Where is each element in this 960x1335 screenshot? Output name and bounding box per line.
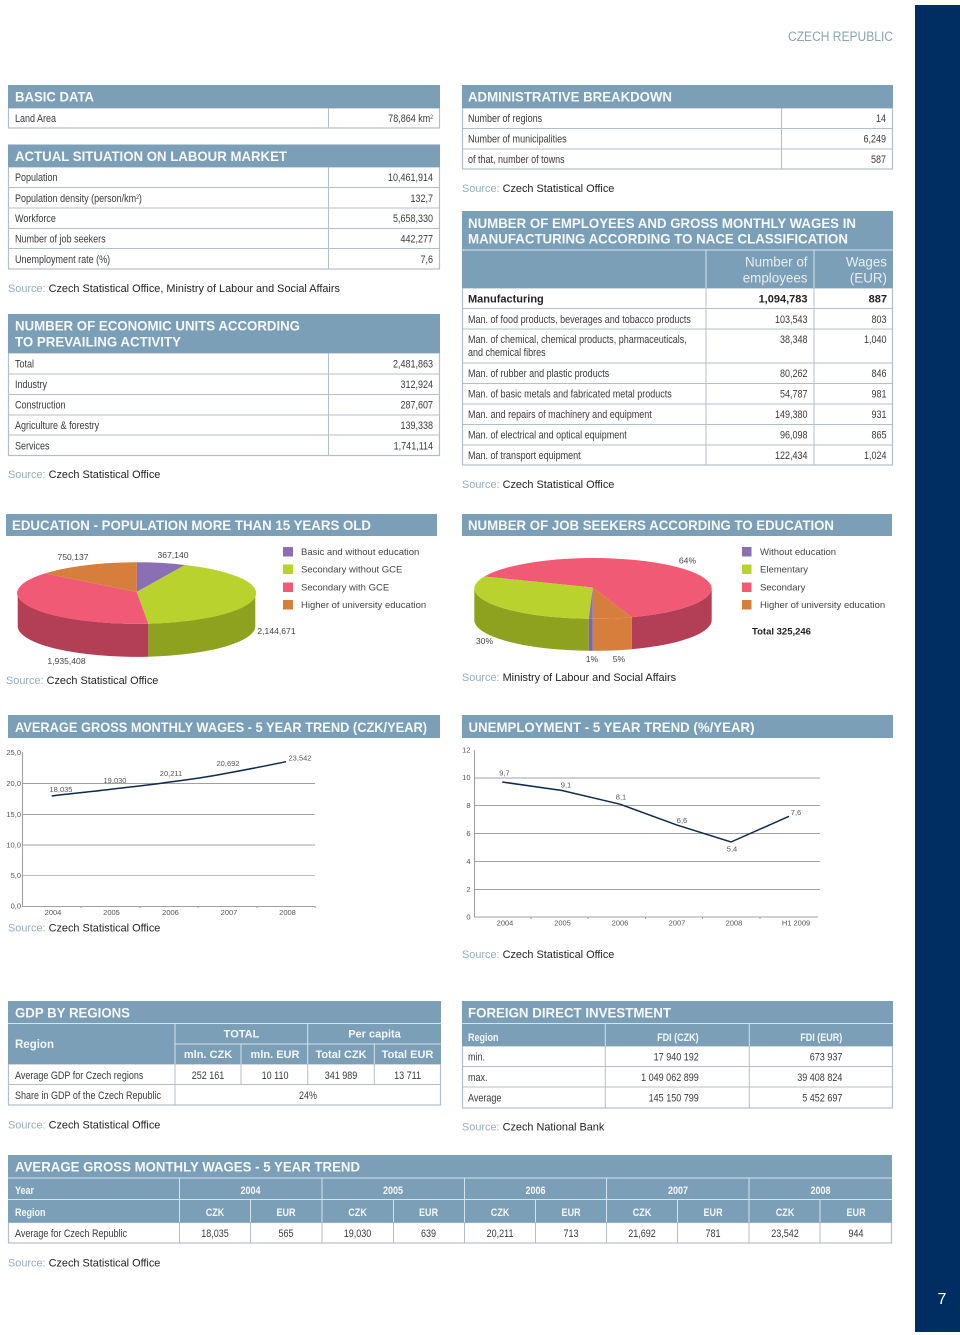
total: job seekers: Total 325,246 bbox=[752, 626, 811, 638]
row: average for Czech Republic bbox=[15, 1228, 864, 1240]
data labels: wages: 20,211 bbox=[160, 769, 182, 778]
panel: job seekers pie bbox=[462, 514, 892, 664]
panel: foreign direct investment bbox=[462, 1001, 893, 1108]
y axis labels: unemployment: 10 bbox=[462, 773, 470, 782]
row: average for Czech Republic: Average for Czech Republic bbox=[15, 1228, 127, 1240]
column headers bbox=[15, 1028, 433, 1061]
currency row: EUR bbox=[704, 1207, 723, 1219]
column headers: FDI (EUR) bbox=[800, 1032, 842, 1044]
rows: labour market data bbox=[15, 172, 433, 266]
rows: economic units data: Total bbox=[15, 359, 34, 371]
rows: administrative data: Number of municipalities bbox=[468, 134, 567, 146]
data labels: unemployment bbox=[499, 768, 801, 854]
rows: labour market data: 5,658,330 bbox=[393, 213, 433, 225]
x axis labels: unemployment: 2005 bbox=[554, 918, 571, 928]
rows: labour market data: 10,461,914 bbox=[388, 172, 433, 184]
rows: labour market data: ) bbox=[139, 193, 142, 205]
source: job seekers: Source: Ministry of Labour and Social Affairs bbox=[462, 672, 677, 684]
row: average for Czech Republic: 18,035 bbox=[201, 1228, 229, 1240]
rows: GDP data: Average GDP for Czech regions bbox=[15, 1070, 143, 1082]
x axis labels: unemployment: 2007 bbox=[669, 918, 685, 928]
rows: labour market data: Population density (person/km bbox=[15, 193, 136, 205]
rows: FDI data: 1 049 062 899 bbox=[641, 1072, 699, 1084]
data labels: unemployment: 9,7 bbox=[499, 768, 510, 778]
rows: manufacturing data: 96,098 bbox=[780, 430, 808, 442]
source: administrative: Source: Czech Statistical Office bbox=[462, 183, 614, 195]
heading: FDI: FOREIGN DIRECT INVESTMENT bbox=[468, 1004, 671, 1020]
y axis labels: unemployment: 0 bbox=[466, 912, 470, 922]
page heading: country: CZECH REPUBLIC bbox=[788, 29, 893, 44]
heading: wages trend table: AVERAGE GROSS MONTHLY WAGES - 5 YEAR TREND bbox=[15, 1158, 360, 1174]
rows: manufacturing data: 149,380 bbox=[775, 409, 808, 421]
x axis labels: unemployment: 2008 bbox=[726, 918, 742, 928]
year row: 2004 bbox=[241, 1185, 261, 1197]
row: average for Czech Republic: 781 bbox=[706, 1228, 721, 1240]
rows: economic units data: 287,607 bbox=[401, 400, 433, 412]
column headers: Per capita bbox=[348, 1028, 402, 1040]
x axis labels: wages: 2008 bbox=[279, 908, 296, 917]
rows: FDI data: 145 150 799 bbox=[649, 1093, 699, 1105]
rows: manufacturing data: 846 bbox=[872, 368, 887, 380]
rows: economic units data: Industry bbox=[15, 379, 47, 391]
rows: administrative data: 14 bbox=[876, 113, 886, 125]
panel: basic data bbox=[8, 85, 440, 128]
heading: job seekers: NUMBER OF JOB SEEKERS ACCORDING TO EDUCATION bbox=[468, 517, 834, 533]
heading: administrative breakdown: ADMINISTRATIVE BREAKDOWN bbox=[468, 88, 672, 104]
rows: economic units data: 2,481,863 bbox=[393, 359, 433, 371]
heading: education: EDUCATION - POPULATION MORE THAN 15 YEARS OLD bbox=[12, 517, 371, 533]
rows: FDI data: 673 937 bbox=[810, 1052, 843, 1064]
rows: manufacturing data: 38,348 bbox=[780, 334, 808, 346]
column headers: employees bbox=[743, 270, 808, 286]
data labels: unemployment: 8,1 bbox=[616, 792, 626, 802]
heading: manufacturing: MANUFACTURING ACCORDING TO NACE CLASSIFICATION bbox=[468, 230, 848, 246]
y axis labels: unemployment: 6 bbox=[466, 829, 470, 838]
column headers: Total CZK bbox=[315, 1049, 367, 1061]
rows: manufacturing data: 803 bbox=[872, 314, 887, 326]
source: FDI: Source: Czech National Bank bbox=[462, 1122, 605, 1134]
line chart: unemployment bbox=[462, 746, 820, 928]
panel: employees and wages in manufacturing bbox=[462, 211, 893, 465]
rows: economic units data: Construction bbox=[15, 400, 66, 412]
rows: economic units data: 1,741,114 bbox=[394, 441, 433, 453]
row: average for Czech Republic: 639 bbox=[421, 1228, 436, 1240]
pie chart: education bbox=[17, 562, 256, 657]
legend: education: Secondary with GCE bbox=[301, 582, 389, 594]
row: average for Czech Republic: 19,030 bbox=[344, 1228, 372, 1240]
pie labels: 1,935,408 bbox=[47, 656, 86, 666]
rows: labour market data: 442,277 bbox=[401, 234, 433, 246]
column headers: Total EUR bbox=[382, 1049, 433, 1061]
y axis labels: wages: 20,0 bbox=[6, 779, 21, 788]
currency row: CZK bbox=[206, 1207, 225, 1219]
rows: GDP data: Share in GDP of the Czech Republic bbox=[15, 1090, 161, 1102]
rows: administrative data: of that, number of towns bbox=[468, 154, 565, 166]
year row: 2006 bbox=[526, 1185, 546, 1197]
column headers: Wages bbox=[846, 254, 887, 270]
rows: manufacturing data: Man. of electrical and optical equipment bbox=[468, 430, 627, 442]
x axis labels: wages bbox=[45, 908, 296, 917]
rows: economic units data: 312,924 bbox=[401, 379, 433, 391]
pie labels bbox=[47, 550, 296, 666]
panel: wages trend table bbox=[8, 1155, 892, 1243]
data labels: wages: 19,030 bbox=[104, 776, 126, 785]
rows: manufacturing data: 80,262 bbox=[780, 368, 808, 380]
year row: Year bbox=[15, 1185, 34, 1197]
rows: FDI data bbox=[468, 1052, 843, 1105]
rows: FDI data: 39 408 824 bbox=[797, 1072, 843, 1084]
panel: actual situation on labour market bbox=[8, 144, 440, 269]
rows: manufacturing data: 103,543 bbox=[775, 314, 808, 326]
data labels: unemployment: 9,1 bbox=[561, 780, 571, 790]
x axis labels: unemployment: 2004 bbox=[497, 918, 513, 928]
currency row: EUR bbox=[562, 1207, 581, 1219]
heading: unemployment trend: UNEMPLOYMENT - 5 YEAR TREND (%/YEAR) bbox=[468, 719, 754, 735]
source: wages trend: Source: Czech Statistical Office bbox=[8, 922, 160, 934]
heading: basic data: BASIC DATA bbox=[15, 88, 94, 104]
panel: administrative breakdown bbox=[462, 85, 893, 169]
row: average for Czech Republic: 20,211 bbox=[487, 1228, 514, 1240]
data labels: wages: 20,692 bbox=[217, 759, 239, 768]
row: manufacturing total bbox=[468, 294, 887, 306]
pie labels: 30% bbox=[476, 636, 493, 646]
row: average for Czech Republic: 713 bbox=[564, 1228, 579, 1240]
y axis labels: unemployment: 8 bbox=[466, 801, 470, 810]
panel: GDP by regions bbox=[8, 1001, 441, 1105]
pie labels: 750,137 bbox=[57, 552, 89, 562]
panel: education pie bbox=[6, 514, 437, 666]
rows: economic units data: Services bbox=[15, 441, 50, 453]
y axis labels: unemployment: 4 bbox=[466, 857, 470, 866]
rows: economic units data: Agriculture & forestry bbox=[15, 420, 99, 432]
y axis labels: wages: 0,0 bbox=[11, 902, 21, 910]
rows: administrative data: 6,249 bbox=[864, 134, 886, 146]
pie chart: job seekers bbox=[474, 558, 712, 651]
rows: manufacturing data: 122,434 bbox=[775, 450, 808, 462]
data labels: unemployment: 5,4 bbox=[727, 844, 737, 854]
rows: labour market data: 7,6 bbox=[421, 254, 433, 266]
sidebar bbox=[915, 5, 960, 1332]
rows: GDP data: 252 161 bbox=[192, 1070, 225, 1082]
column headers: Number of bbox=[745, 254, 808, 270]
rows: manufacturing data: Man. of transport equipment bbox=[468, 450, 581, 462]
source: unemployment trend: Source: Czech Statistical Office bbox=[462, 949, 614, 961]
x axis labels: wages: 2005 bbox=[103, 908, 120, 917]
rows: economic units data: 139,338 bbox=[401, 420, 433, 432]
row: land area bbox=[15, 113, 433, 125]
row: average for Czech Republic: 23,542 bbox=[771, 1228, 799, 1240]
source: labour market: Source: Czech Statistical Office, Ministry of Labour and Social Affairs bbox=[8, 283, 340, 295]
column headers bbox=[743, 254, 887, 286]
row: land area: 2 bbox=[430, 115, 433, 121]
pie labels: 1% bbox=[586, 654, 599, 664]
year row: 2007 bbox=[668, 1185, 688, 1197]
data labels: unemployment: 6,6 bbox=[677, 816, 687, 825]
rows: GDP data: 10 110 bbox=[262, 1070, 289, 1082]
rows: FDI data: 17 940 192 bbox=[654, 1052, 699, 1064]
legend: job seekers bbox=[742, 547, 885, 611]
heading: GDP by regions: GDP BY REGIONS bbox=[15, 1004, 130, 1020]
data labels: wages: 18,035 bbox=[50, 785, 72, 794]
year row bbox=[15, 1185, 831, 1197]
year row: 2005 bbox=[383, 1185, 403, 1197]
rows: manufacturing data: 54,787 bbox=[780, 389, 808, 401]
rows: manufacturing data: Man. of basic metals and fabricated metal products bbox=[468, 389, 672, 401]
line chart: wages bbox=[6, 748, 315, 917]
rows: manufacturing data: Man. of rubber and plastic products bbox=[468, 368, 609, 380]
y axis labels: wages: 25,0 bbox=[6, 748, 21, 757]
rows: manufacturing data: 1,040 bbox=[864, 334, 887, 346]
rows: manufacturing data: 981 bbox=[872, 389, 887, 401]
legend: job seekers: Elementary bbox=[760, 564, 808, 576]
rows: labour market data: Workforce bbox=[15, 213, 56, 225]
rows: manufacturing data: 865 bbox=[872, 430, 887, 442]
y axis labels: wages: 15,0 bbox=[6, 810, 21, 819]
data labels: unemployment: 7,6 bbox=[791, 808, 801, 817]
row: average for Czech Republic: 21,692 bbox=[628, 1228, 656, 1240]
pie labels: 64% bbox=[679, 556, 696, 566]
rows: FDI data: Average bbox=[468, 1093, 502, 1105]
panel: unemployment trend chart bbox=[462, 715, 893, 928]
currency row: CZK bbox=[633, 1207, 652, 1219]
column headers: Region bbox=[468, 1032, 499, 1044]
source: economic units: Source: Czech Statistical Office bbox=[8, 469, 160, 481]
rows: labour market data: Number of job seekers bbox=[15, 234, 106, 246]
row: average for Czech Republic: 565 bbox=[279, 1228, 294, 1240]
rows: manufacturing data: 931 bbox=[872, 409, 887, 421]
source: GDP: Source: Czech Statistical Office bbox=[8, 1120, 160, 1132]
currency row: Region bbox=[15, 1207, 46, 1219]
source: wages trend table: Source: Czech Statistical Office bbox=[8, 1258, 160, 1270]
heading: economic units bbox=[15, 318, 300, 350]
heading: manufacturing bbox=[468, 215, 856, 246]
legend: job seekers: Without education bbox=[760, 547, 836, 558]
y axis labels: unemployment: 12 bbox=[462, 746, 470, 754]
column headers: mln. EUR bbox=[251, 1049, 299, 1061]
year row: 2008 bbox=[811, 1185, 831, 1197]
currency row bbox=[15, 1207, 866, 1219]
column headers: mln. CZK bbox=[184, 1049, 232, 1061]
rows: FDI data: max. bbox=[468, 1072, 488, 1084]
x axis labels: wages: 2006 bbox=[162, 908, 179, 917]
rows: GDP data: 341 989 bbox=[325, 1070, 358, 1082]
panel: economic units bbox=[8, 314, 440, 456]
rows: labour market data: Population bbox=[15, 172, 58, 184]
rows: GDP data: 24% bbox=[299, 1090, 317, 1102]
pie labels: 2,144,671 bbox=[257, 626, 296, 636]
currency row: EUR bbox=[847, 1207, 866, 1219]
row: land area: Land Area bbox=[15, 113, 56, 125]
rows: administrative data: Number of regions bbox=[468, 113, 542, 125]
rows: manufacturing data bbox=[468, 314, 887, 462]
rows: manufacturing data: Man. of food products, beverages and tobacco products bbox=[468, 314, 691, 326]
legend: job seekers: Higher of university education bbox=[760, 600, 885, 611]
legend: education: Basic and without education bbox=[301, 547, 419, 558]
legend: education: Higher of university education bbox=[301, 600, 426, 611]
rows: administrative data bbox=[468, 113, 886, 166]
pie labels: 5% bbox=[613, 654, 626, 664]
row: land area: 78,864 km bbox=[388, 113, 430, 125]
x axis labels: unemployment: H1 2009 bbox=[782, 918, 810, 928]
legend: education bbox=[283, 547, 426, 611]
pie labels: 367,140 bbox=[157, 550, 189, 560]
x axis labels: unemployment: 2006 bbox=[612, 918, 628, 928]
column headers: TOTAL bbox=[224, 1028, 260, 1040]
rows: FDI data: min. bbox=[468, 1052, 485, 1064]
page number: 7 bbox=[938, 1291, 947, 1308]
currency row: CZK bbox=[348, 1207, 367, 1219]
rows: manufacturing data: 1,024 bbox=[864, 450, 887, 462]
panel: wages trend chart bbox=[6, 715, 440, 917]
legend: education: Secondary without GCE bbox=[301, 564, 402, 576]
source: education: Source: Czech Statistical Office bbox=[6, 675, 158, 687]
y axis labels: wages: 5,0 bbox=[11, 871, 21, 880]
x axis labels: wages: 2004 bbox=[45, 908, 61, 917]
data labels: wages bbox=[50, 754, 311, 794]
rows: manufacturing data: Man. of chemical, chemical products, pharmaceuticals, bbox=[468, 334, 687, 346]
row: manufacturing total: 887 bbox=[869, 294, 887, 306]
rows: labour market data: 132,7 bbox=[411, 193, 433, 205]
heading: economic units: TO PREVAILING ACTIVITY bbox=[15, 334, 182, 350]
heading: wages trend: AVERAGE GROSS MONTHLY WAGES - 5 YEAR TREND (CZK/YEAR) bbox=[15, 719, 427, 735]
rows: GDP data: 13 711 bbox=[394, 1070, 421, 1082]
rows: economic units data bbox=[15, 359, 433, 453]
row: manufacturing total: Manufacturing bbox=[468, 294, 544, 306]
column headers bbox=[468, 1032, 842, 1044]
rows: GDP data bbox=[15, 1070, 421, 1102]
y axis labels: wages: 10,0 bbox=[6, 840, 21, 850]
row: average for Czech Republic: 944 bbox=[849, 1228, 864, 1240]
row: manufacturing total: 1,094,783 bbox=[759, 294, 808, 306]
rows: FDI data: 5 452 697 bbox=[802, 1093, 843, 1105]
pie labels bbox=[476, 556, 696, 664]
heading: manufacturing: NUMBER OF EMPLOYEES AND GROSS MONTHLY WAGES IN bbox=[468, 215, 856, 231]
column headers: FDI (CZK) bbox=[657, 1032, 699, 1044]
x axis labels: unemployment bbox=[497, 918, 810, 928]
rows: labour market data: Unemployment rate (%) bbox=[15, 254, 110, 266]
rows: administrative data: 587 bbox=[871, 154, 886, 166]
x axis labels: wages: 2007 bbox=[221, 908, 237, 917]
currency row: CZK bbox=[776, 1207, 795, 1219]
source: manufacturing: Source: Czech Statistical Office bbox=[462, 479, 614, 491]
y axis labels: unemployment: 2 bbox=[466, 885, 470, 894]
rows: manufacturing data: Man. and repairs of machinery and equipment bbox=[468, 409, 652, 421]
column headers: (EUR) bbox=[850, 270, 887, 286]
legend: job seekers: Secondary bbox=[760, 582, 806, 594]
data labels: wages: 23,542 bbox=[289, 754, 311, 762]
column headers: Region bbox=[15, 1039, 54, 1051]
rows: manufacturing data: and chemical fibres bbox=[468, 347, 546, 359]
y axis labels: unemployment bbox=[462, 746, 470, 922]
y axis labels: wages bbox=[6, 748, 21, 910]
heading: labour market: ACTUAL SITUATION ON LABOUR MARKET bbox=[15, 148, 287, 164]
currency row: CZK bbox=[491, 1207, 510, 1219]
currency row: EUR bbox=[419, 1207, 439, 1219]
rows: labour market data: 2 bbox=[136, 195, 139, 201]
currency row: EUR bbox=[277, 1207, 296, 1219]
heading: economic units: NUMBER OF ECONOMIC UNITS ACCORDING bbox=[15, 318, 300, 334]
